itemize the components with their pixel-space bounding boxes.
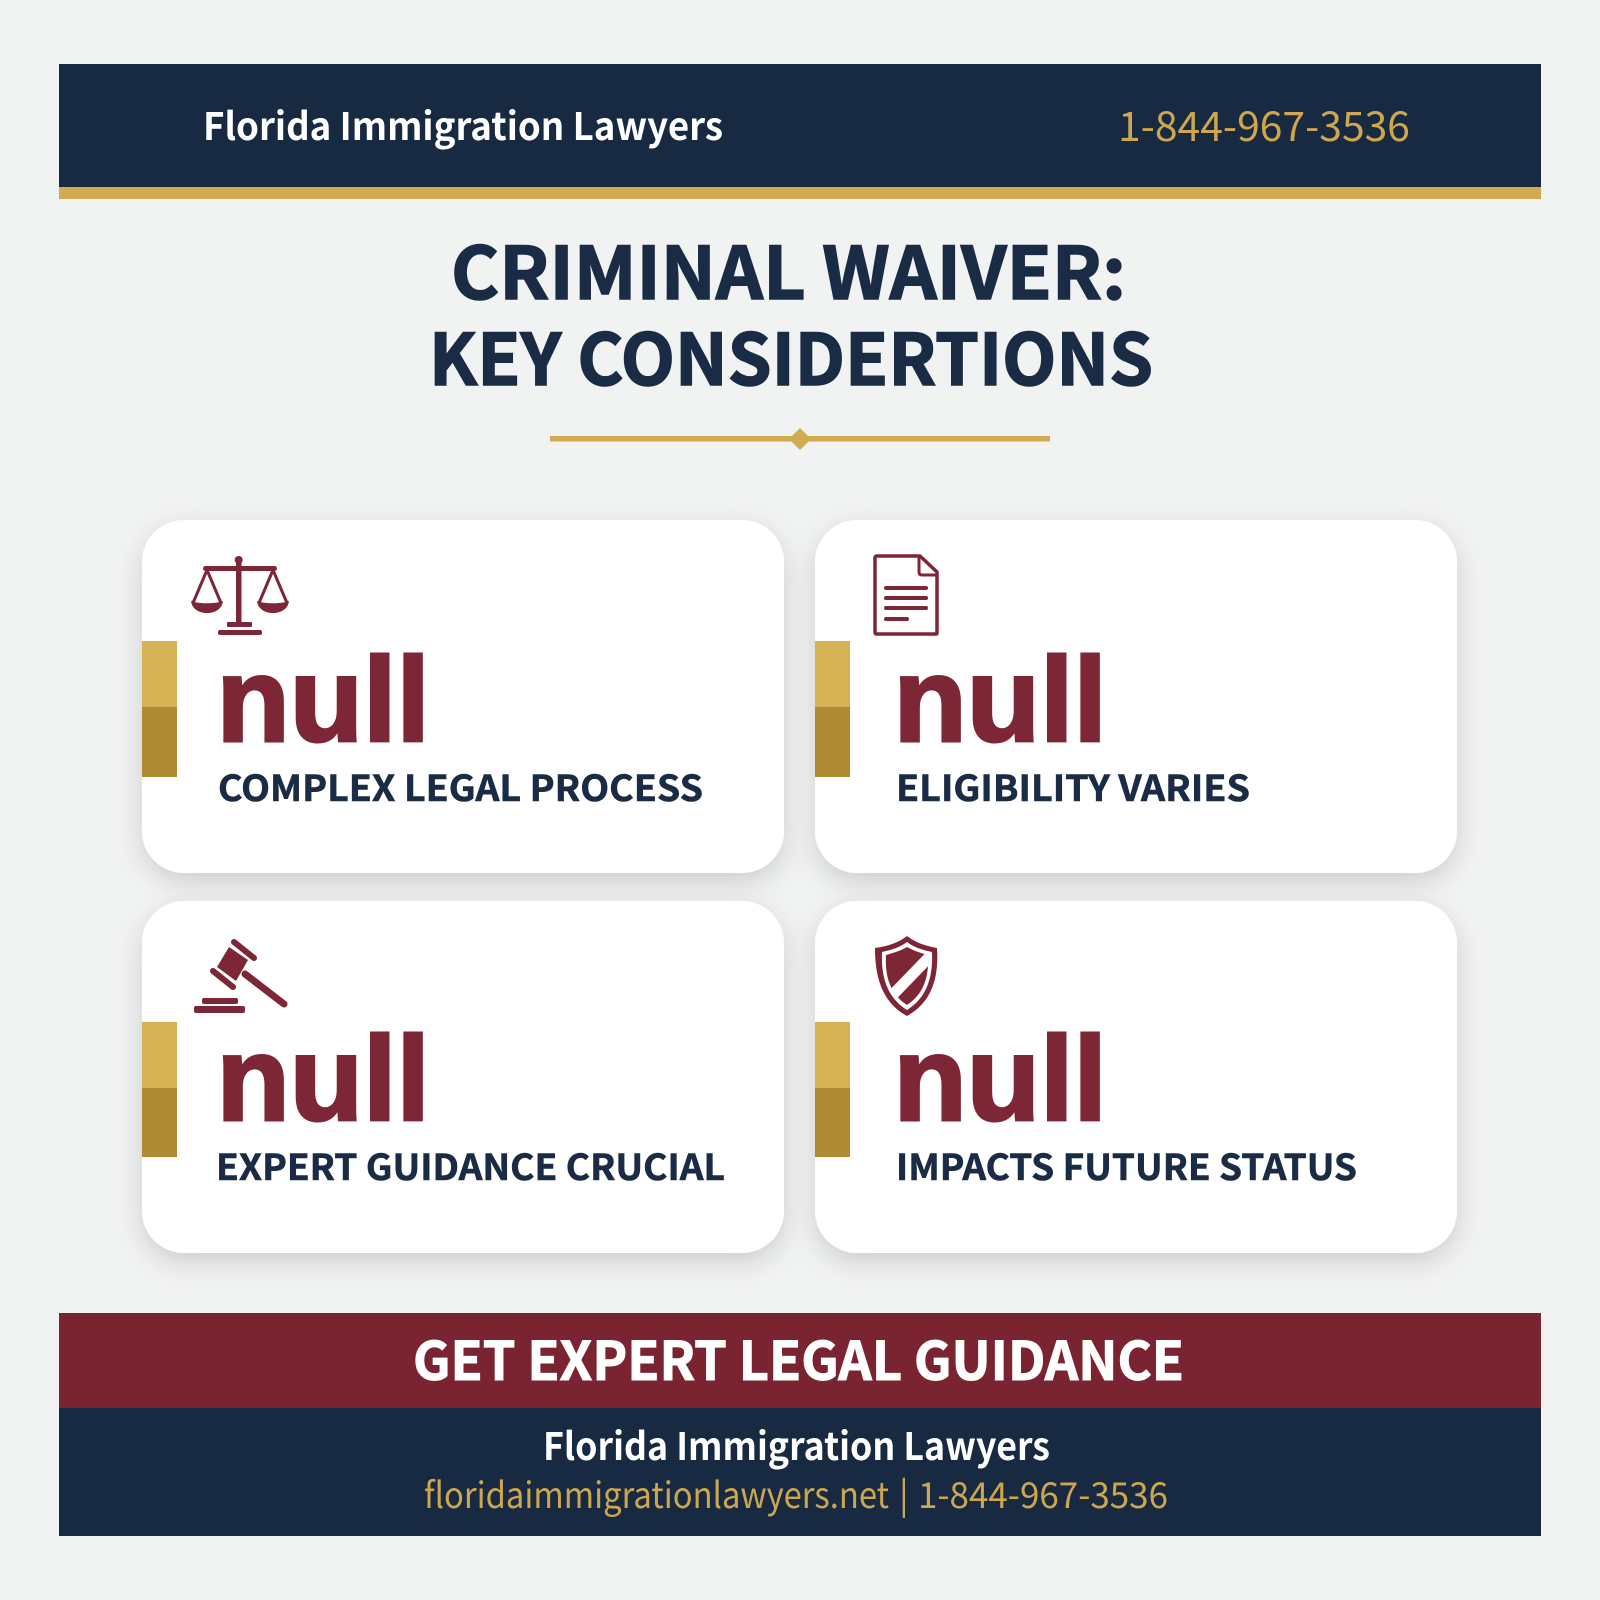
gold accent bar — [815, 1022, 850, 1157]
icon: document — [875, 556, 937, 634]
call to action band — [59, 1313, 1541, 1408]
title: CRIMINAL WAIVER: — [451, 215, 1126, 320]
footer website and phone: | — [899, 1467, 909, 1519]
stat value: null — [894, 1012, 1107, 1146]
card: expert guidance crucial — [142, 901, 784, 1253]
title — [429, 215, 1153, 406]
stat value: null — [216, 633, 430, 767]
icon: shield — [875, 936, 938, 1016]
icon: scales of justice — [191, 556, 289, 635]
gold accent bar — [815, 641, 850, 777]
firm name: Florida Immigration Lawyers — [203, 96, 723, 151]
card label: IMPACTS FUTURE STATUS — [896, 1139, 1357, 1191]
title: KEY CONSIDERTIONS — [429, 304, 1153, 406]
gold accent bar — [142, 641, 177, 777]
icon: gavel — [194, 942, 284, 1013]
card label: COMPLEX LEGAL PROCESS — [218, 760, 703, 812]
footer website and phone: 1-844-967-3536 — [918, 1467, 1168, 1519]
header phone number: 1-844-967-3536 — [1118, 93, 1410, 153]
call to action text: GET EXPERT LEGAL GUIDANCE — [413, 1320, 1184, 1396]
card: eligibility varies — [815, 520, 1457, 873]
stat value: null — [216, 1012, 430, 1146]
footer website and phone — [424, 1467, 1168, 1519]
card: impacts future status — [815, 901, 1457, 1253]
footer firm name: Florida Immigration Lawyers — [543, 1416, 1050, 1471]
title divider with diamond — [550, 428, 1050, 450]
card: complex legal process — [142, 520, 784, 873]
card label: ELIGIBILITY VARIES — [896, 760, 1250, 812]
header band — [59, 64, 1541, 199]
stat value: null — [894, 633, 1107, 767]
footer band — [59, 1408, 1541, 1536]
card label: EXPERT GUIDANCE CRUCIAL — [216, 1139, 725, 1191]
footer website and phone: floridaimmigrationlawyers.net — [424, 1467, 889, 1519]
gold accent bar — [142, 1022, 177, 1157]
